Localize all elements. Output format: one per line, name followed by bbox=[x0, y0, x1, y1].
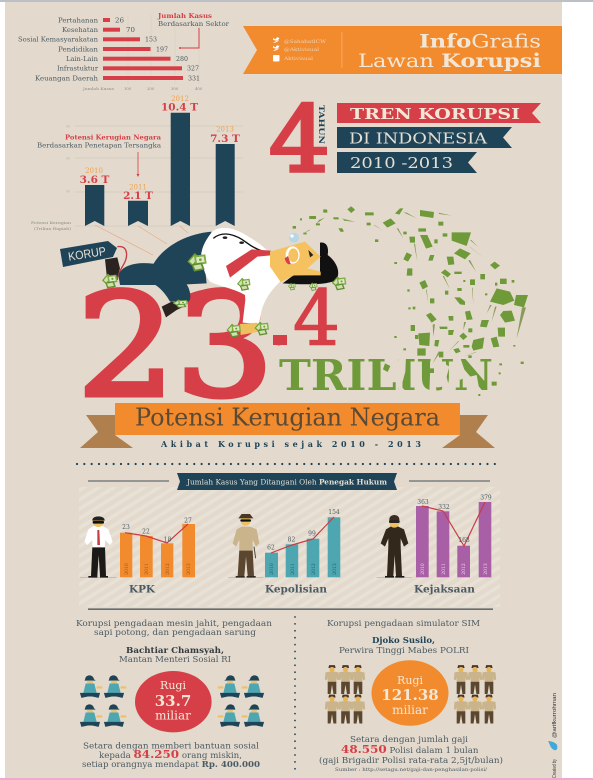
legend: jumlah kasus berdasarkan sektor: Jumlah Kasus bbox=[157, 12, 212, 20]
case description bbox=[76, 619, 272, 637]
icons: police officers bbox=[325, 665, 496, 723]
bar chart: jumlah kasus berdasarkan sektor: Kesehatan bbox=[62, 26, 98, 34]
bar chart: jumlah kasus berdasarkan sektor: 70 bbox=[126, 27, 135, 34]
chart: KPK: 18 bbox=[164, 536, 171, 544]
bar chart: jumlah kasus berdasarkan sektor: 197 bbox=[156, 46, 168, 53]
ribbon: di indonesia bbox=[337, 127, 512, 148]
equivalence text bbox=[82, 742, 260, 769]
figure: prosecutor bbox=[377, 515, 412, 578]
big number 23.4 triliun: 4 bbox=[293, 274, 340, 362]
bar chart: jumlah kasus berdasarkan sektor: Infrastuktur bbox=[57, 65, 99, 73]
bar chart: jumlah kasus berdasarkan sektor: 100 bbox=[124, 86, 132, 91]
bar chart: jumlah kasus berdasarkan sektor: 200 bbox=[147, 86, 155, 91]
chart: Kepolisian: 2012 bbox=[311, 563, 317, 575]
equivalence text bbox=[319, 735, 503, 773]
chart: Kepolisian: 2011 bbox=[290, 563, 296, 575]
credit: created by: @arifkurrohman bbox=[552, 693, 558, 738]
circle: rugi 121.38 miliar bbox=[372, 660, 448, 726]
bar chart: potensi kerugian negara: ?? bbox=[66, 157, 70, 161]
equivalence text: (gaji Brigadir Polisi rata-rata 2,5jt/bulan) bbox=[319, 756, 503, 765]
circle: rugi 121.38 miliar: miliar bbox=[392, 703, 428, 717]
bar chart: jumlah kasus berdasarkan sektor: Pendidikan bbox=[58, 45, 98, 53]
circle: rugi 33.7 miliar: miliar bbox=[155, 708, 191, 722]
chart: Kejaksaan: 363 bbox=[417, 499, 429, 506]
social icons and handles bbox=[273, 37, 326, 62]
bar chart: potensi kerugian negara: 2012 bbox=[171, 95, 189, 103]
chart: Kepolisian: 2013 bbox=[332, 563, 338, 575]
bar chart: potensi kerugian negara: 2013 bbox=[216, 126, 234, 134]
equivalence text: setiap orangnya mendapat Rp. 400.000 bbox=[82, 759, 260, 769]
circle: rugi 33.7 miliar: 33.7 bbox=[155, 692, 191, 710]
bar chart: jumlah kasus berdasarkan sektor: 153 bbox=[145, 37, 157, 44]
ribbon: di indonesia: DI INDONESIA bbox=[349, 130, 487, 148]
chart: KPK: 2012 bbox=[165, 563, 171, 575]
title: Info Grafis bbox=[419, 30, 541, 52]
legend: jumlah kasus berdasarkan sektor: Berdasarkan Sektor bbox=[158, 20, 230, 28]
big number 23.4 triliun: 23 bbox=[77, 264, 274, 429]
equivalence text: Sumber : http://setagu.net/gaji-dan-penghasilan-polisi/ bbox=[335, 767, 488, 773]
bar chart: jumlah kasus berdasarkan sektor: Keuangan Daerah bbox=[35, 74, 98, 82]
bar chart: potensi kerugian negara: ?? bbox=[66, 125, 70, 129]
panel: kasus penegak hukum bbox=[79, 473, 500, 607]
legend: jumlah kasus berdasarkan sektor bbox=[157, 12, 230, 49]
chart: KPK: 2010 bbox=[124, 563, 130, 575]
circle: rugi 121.38 miliar: Rugi bbox=[397, 674, 423, 687]
ribbon: tren korupsi bbox=[337, 103, 541, 123]
bar chart: jumlah kasus berdasarkan sektor: 300 bbox=[171, 86, 179, 91]
chart: Kepolisian bbox=[265, 509, 340, 596]
illustration: corruptor figure bbox=[102, 228, 346, 338]
social icons and handles: @SahabatICW bbox=[284, 38, 326, 45]
ribbon: potensi kerugian negara: Potensi Kerugian Negara bbox=[135, 404, 440, 432]
person name: Bachtiar Chamsyah, bbox=[126, 645, 224, 655]
bar chart: potensi kerugian negara: Potensi Kerugian bbox=[31, 220, 72, 225]
big number 23.4 triliun: TRILIUN bbox=[279, 351, 493, 400]
section heading banner bbox=[177, 473, 397, 490]
person name: Mantan Menteri Sosial RI bbox=[119, 655, 231, 664]
chart: Kejaksaan: 168 bbox=[458, 537, 470, 544]
heading: 4 tahun tren korupsi bbox=[269, 88, 541, 193]
person name bbox=[339, 635, 469, 655]
big number 23.4 triliun: . bbox=[271, 299, 287, 357]
chart: Kejaksaan: 2012 bbox=[461, 563, 467, 575]
bar chart: potensi kerugian negara: 7.3 T bbox=[210, 133, 240, 145]
bar chart: jumlah kasus berdasarkan sektor: 331 bbox=[188, 75, 200, 82]
chart: KPK: 27 bbox=[184, 518, 192, 524]
person name: Perwira Tinggi Mabes POLRI bbox=[339, 646, 469, 655]
bar chart: jumlah kasus berdasarkan sektor: Pertahanan bbox=[58, 16, 98, 24]
chart: Kejaksaan: 2010 bbox=[420, 563, 426, 575]
icons: poor recipients bbox=[80, 675, 264, 727]
figure: police officer bbox=[228, 514, 263, 578]
debris near the mouth bbox=[293, 206, 355, 234]
ribbon: potensi kerugian negara bbox=[80, 403, 495, 448]
bar chart: jumlah kasus berdasarkan sektor bbox=[18, 14, 203, 91]
case description: sapi potong, dan pengadaan sarung bbox=[94, 628, 256, 637]
chart: KPK bbox=[120, 518, 195, 596]
chart: Kepolisian: 99 bbox=[308, 530, 316, 538]
bar chart: jumlah kasus berdasarkan sektor: 26 bbox=[115, 17, 124, 24]
chart: Kepolisian: 82 bbox=[288, 536, 295, 544]
equivalence text: kepada 84.250 orang miskin, bbox=[99, 748, 242, 761]
person name: Djoko Susilo, bbox=[372, 635, 435, 645]
illustration: dissolving money bbox=[303, 207, 528, 396]
chart: Kepolisian: Kepolisian bbox=[265, 584, 328, 596]
panel: bachtiar chamsyah case bbox=[76, 619, 272, 769]
bar chart: potensi kerugian negara: 2.1 T bbox=[123, 190, 153, 202]
case description: Korupsi pengadaan simulator SIM bbox=[327, 619, 480, 628]
heading: 4 tahun tren korupsi: TAHUN bbox=[317, 105, 326, 144]
title bbox=[358, 30, 541, 72]
bar chart: potensi kerugian negara: 3.6 T bbox=[80, 174, 110, 186]
credit: created by bbox=[548, 693, 558, 778]
heading: 4 tahun tren korupsi: 4 bbox=[269, 88, 330, 193]
chart: Kejaksaan: Kejaksaan bbox=[414, 584, 476, 596]
chart: Kepolisian: 154 bbox=[328, 509, 340, 516]
chart: Kejaksaan: 2011 bbox=[441, 563, 447, 575]
equivalence text: Setara dengan memberi bantuan sosial bbox=[83, 742, 259, 750]
bar chart: jumlah kasus berdasarkan sektor: Jumlah Kasus bbox=[82, 86, 114, 91]
bar chart: potensi kerugian negara: Berdasarkan Penetapan Tersangka bbox=[37, 142, 161, 150]
chart: KPK: 22 bbox=[142, 528, 150, 536]
chart: KPK: 23 bbox=[122, 524, 130, 531]
subtitle: Akibat Korupsi sejak 2010 - 2013 bbox=[160, 439, 421, 449]
tag: korup: KORUP bbox=[67, 244, 107, 264]
big number 23.4 triliun bbox=[77, 264, 493, 429]
ribbon: tren korupsi: TREN KORUPSI bbox=[350, 105, 520, 123]
bar chart: potensi kerugian negara: Potensi Kerugian Negara bbox=[65, 134, 162, 142]
social icons and handles: Aktivisual bbox=[283, 56, 314, 62]
bar chart: jumlah kasus berdasarkan sektor: 280 bbox=[176, 56, 188, 63]
bar chart: jumlah kasus berdasarkan sektor: 400 bbox=[195, 86, 203, 91]
ribbon: 2010-2013: 2010 -2013 bbox=[350, 154, 453, 172]
tag: korup bbox=[60, 241, 117, 267]
figure: KPK officer bbox=[80, 516, 117, 578]
bar chart: potensi kerugian negara: 2010 bbox=[85, 167, 103, 175]
case description: Korupsi pengadaan mesin jahit, pengadaan bbox=[76, 619, 272, 628]
bar chart: potensi kerugian negara: 2011 bbox=[129, 184, 147, 192]
credit: created by: Created by bbox=[552, 759, 558, 778]
header banner bbox=[243, 26, 562, 74]
social icons and handles: @Aktivisual bbox=[284, 46, 320, 53]
chart: KPK: 2013 bbox=[186, 563, 192, 575]
bar chart: potensi kerugian negara bbox=[31, 95, 243, 255]
panel: djoko susilo case bbox=[319, 619, 503, 773]
equivalence text: Setara dengan jumlah gaji bbox=[350, 735, 468, 744]
title: Lawan Korupsi bbox=[358, 50, 541, 72]
chart: KPK: 2011 bbox=[144, 563, 150, 575]
person name bbox=[119, 645, 231, 664]
circle: rugi 33.7 miliar: Rugi bbox=[160, 679, 186, 692]
chart: Kepolisian: 2010 bbox=[269, 563, 275, 575]
chart: Kejaksaan bbox=[414, 494, 492, 596]
chart: KPK: KPK bbox=[129, 584, 155, 596]
circle: rugi 121.38 miliar: 121.38 bbox=[381, 686, 439, 704]
bar chart: jumlah kasus berdasarkan sektor: Sosial Kemasyarakatan bbox=[18, 36, 98, 44]
bar chart: jumlah kasus berdasarkan sektor: Lain-Lain bbox=[66, 55, 98, 63]
bar chart: potensi kerugian negara: 10.4 T bbox=[161, 102, 198, 114]
bar chart: jumlah kasus berdasarkan sektor: 327 bbox=[187, 66, 199, 73]
chart: Kejaksaan: 332 bbox=[438, 504, 450, 511]
equivalence text: 48.550 Polisi dalam 1 bulan bbox=[341, 743, 478, 756]
bar chart: potensi kerugian negara: ?? bbox=[66, 190, 70, 194]
chart: Kepolisian: 62 bbox=[267, 544, 275, 552]
section heading banner: Jumlah Kasus Yang Ditangani Oleh Penegak Hukum bbox=[186, 478, 387, 486]
chart: Kejaksaan: 2013 bbox=[483, 563, 489, 575]
bar chart: potensi kerugian negara: (Triliun Rupiah) bbox=[34, 226, 72, 231]
circle: rugi 33.7 miliar bbox=[135, 671, 212, 732]
chart: Kejaksaan: 379 bbox=[480, 494, 492, 502]
ribbon: 2010-2013 bbox=[337, 152, 477, 173]
